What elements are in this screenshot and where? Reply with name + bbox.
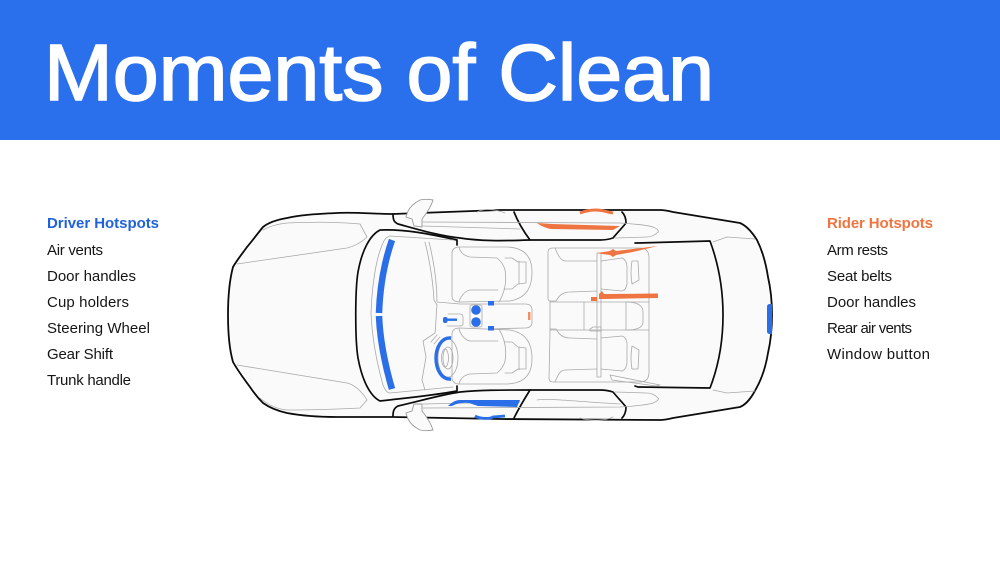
icon: rider arm rest hotspot [537,223,620,230]
heading: rider hotspots: Rider Hotspots [827,215,933,232]
title: Moments of Clean [44,28,714,117]
panel: driver hotspots list [47,215,159,389]
icon: air vents hotspot [379,240,392,389]
icon: trunk handle hotspot [767,304,772,334]
list item: cup holders: Cup holders [47,294,129,311]
list item: arm rests: Arm rests [827,242,888,259]
list item: trunk handle: Trunk handle [47,372,131,389]
panel: rider hotspots list [827,215,933,363]
list item: gear shift: Gear Shift [47,346,114,363]
icon: steering wheel hotspot [436,338,458,379]
heading: driver hotspots: Driver Hotspots [47,215,159,232]
icon: rider door handle hotspot [580,210,613,213]
car top-view illustration [228,199,772,431]
list item: steering wheel: Steering Wheel [47,320,150,337]
list item: air vents: Air vents [47,242,103,259]
dashboard and centre console [371,236,532,393]
list item: window button: Window button [827,346,930,363]
hood and trunk panel lines [237,222,755,410]
icon: cup holders hotspot [471,301,494,330]
list item: door handles: Door handles [47,268,136,285]
rear seats [548,248,660,386]
icon: rear seat belt hotspots [591,246,658,301]
header banner [0,0,1000,140]
cabin floor [356,230,723,401]
list item: door handles: Door handles [827,294,916,311]
door window lines [423,210,658,420]
side mirror top [406,199,433,227]
icon: driver door handle hotspot [448,400,520,418]
front seats [452,247,532,384]
list item: rear air vents: Rear air vents [827,320,912,337]
icon: gear shift hotspot [443,317,457,323]
windshield, doors and rear window outlines [356,212,723,418]
side mirror bottom [406,404,433,431]
car body outline [228,210,772,420]
icon: window button hotspot [528,312,530,320]
list item: seat belts: Seat belts [827,268,892,285]
